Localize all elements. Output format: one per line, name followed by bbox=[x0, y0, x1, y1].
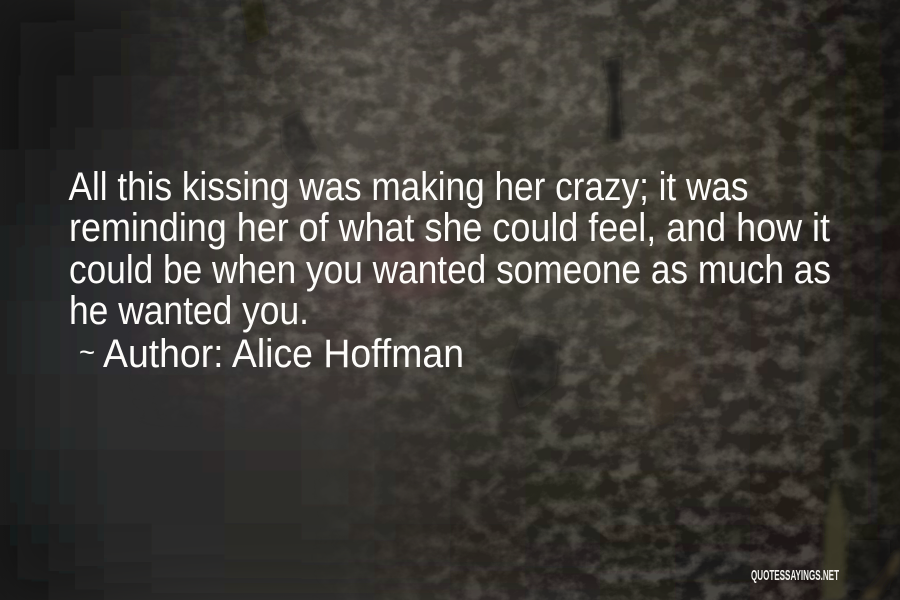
quote text bbox=[68, 165, 831, 333]
tilde: ~ bbox=[79, 336, 95, 369]
author attribution bbox=[79, 332, 464, 376]
quote line 2: reminding her of what she could feel, and how it bbox=[69, 206, 830, 250]
quote line 4: he wanted you. bbox=[69, 289, 309, 333]
quote line 3: could be when you wanted someone as much as bbox=[69, 248, 831, 292]
author name: Author: Alice Hoffman bbox=[103, 332, 464, 376]
quote line 1: All this kissing was making her crazy; it was bbox=[68, 165, 748, 209]
